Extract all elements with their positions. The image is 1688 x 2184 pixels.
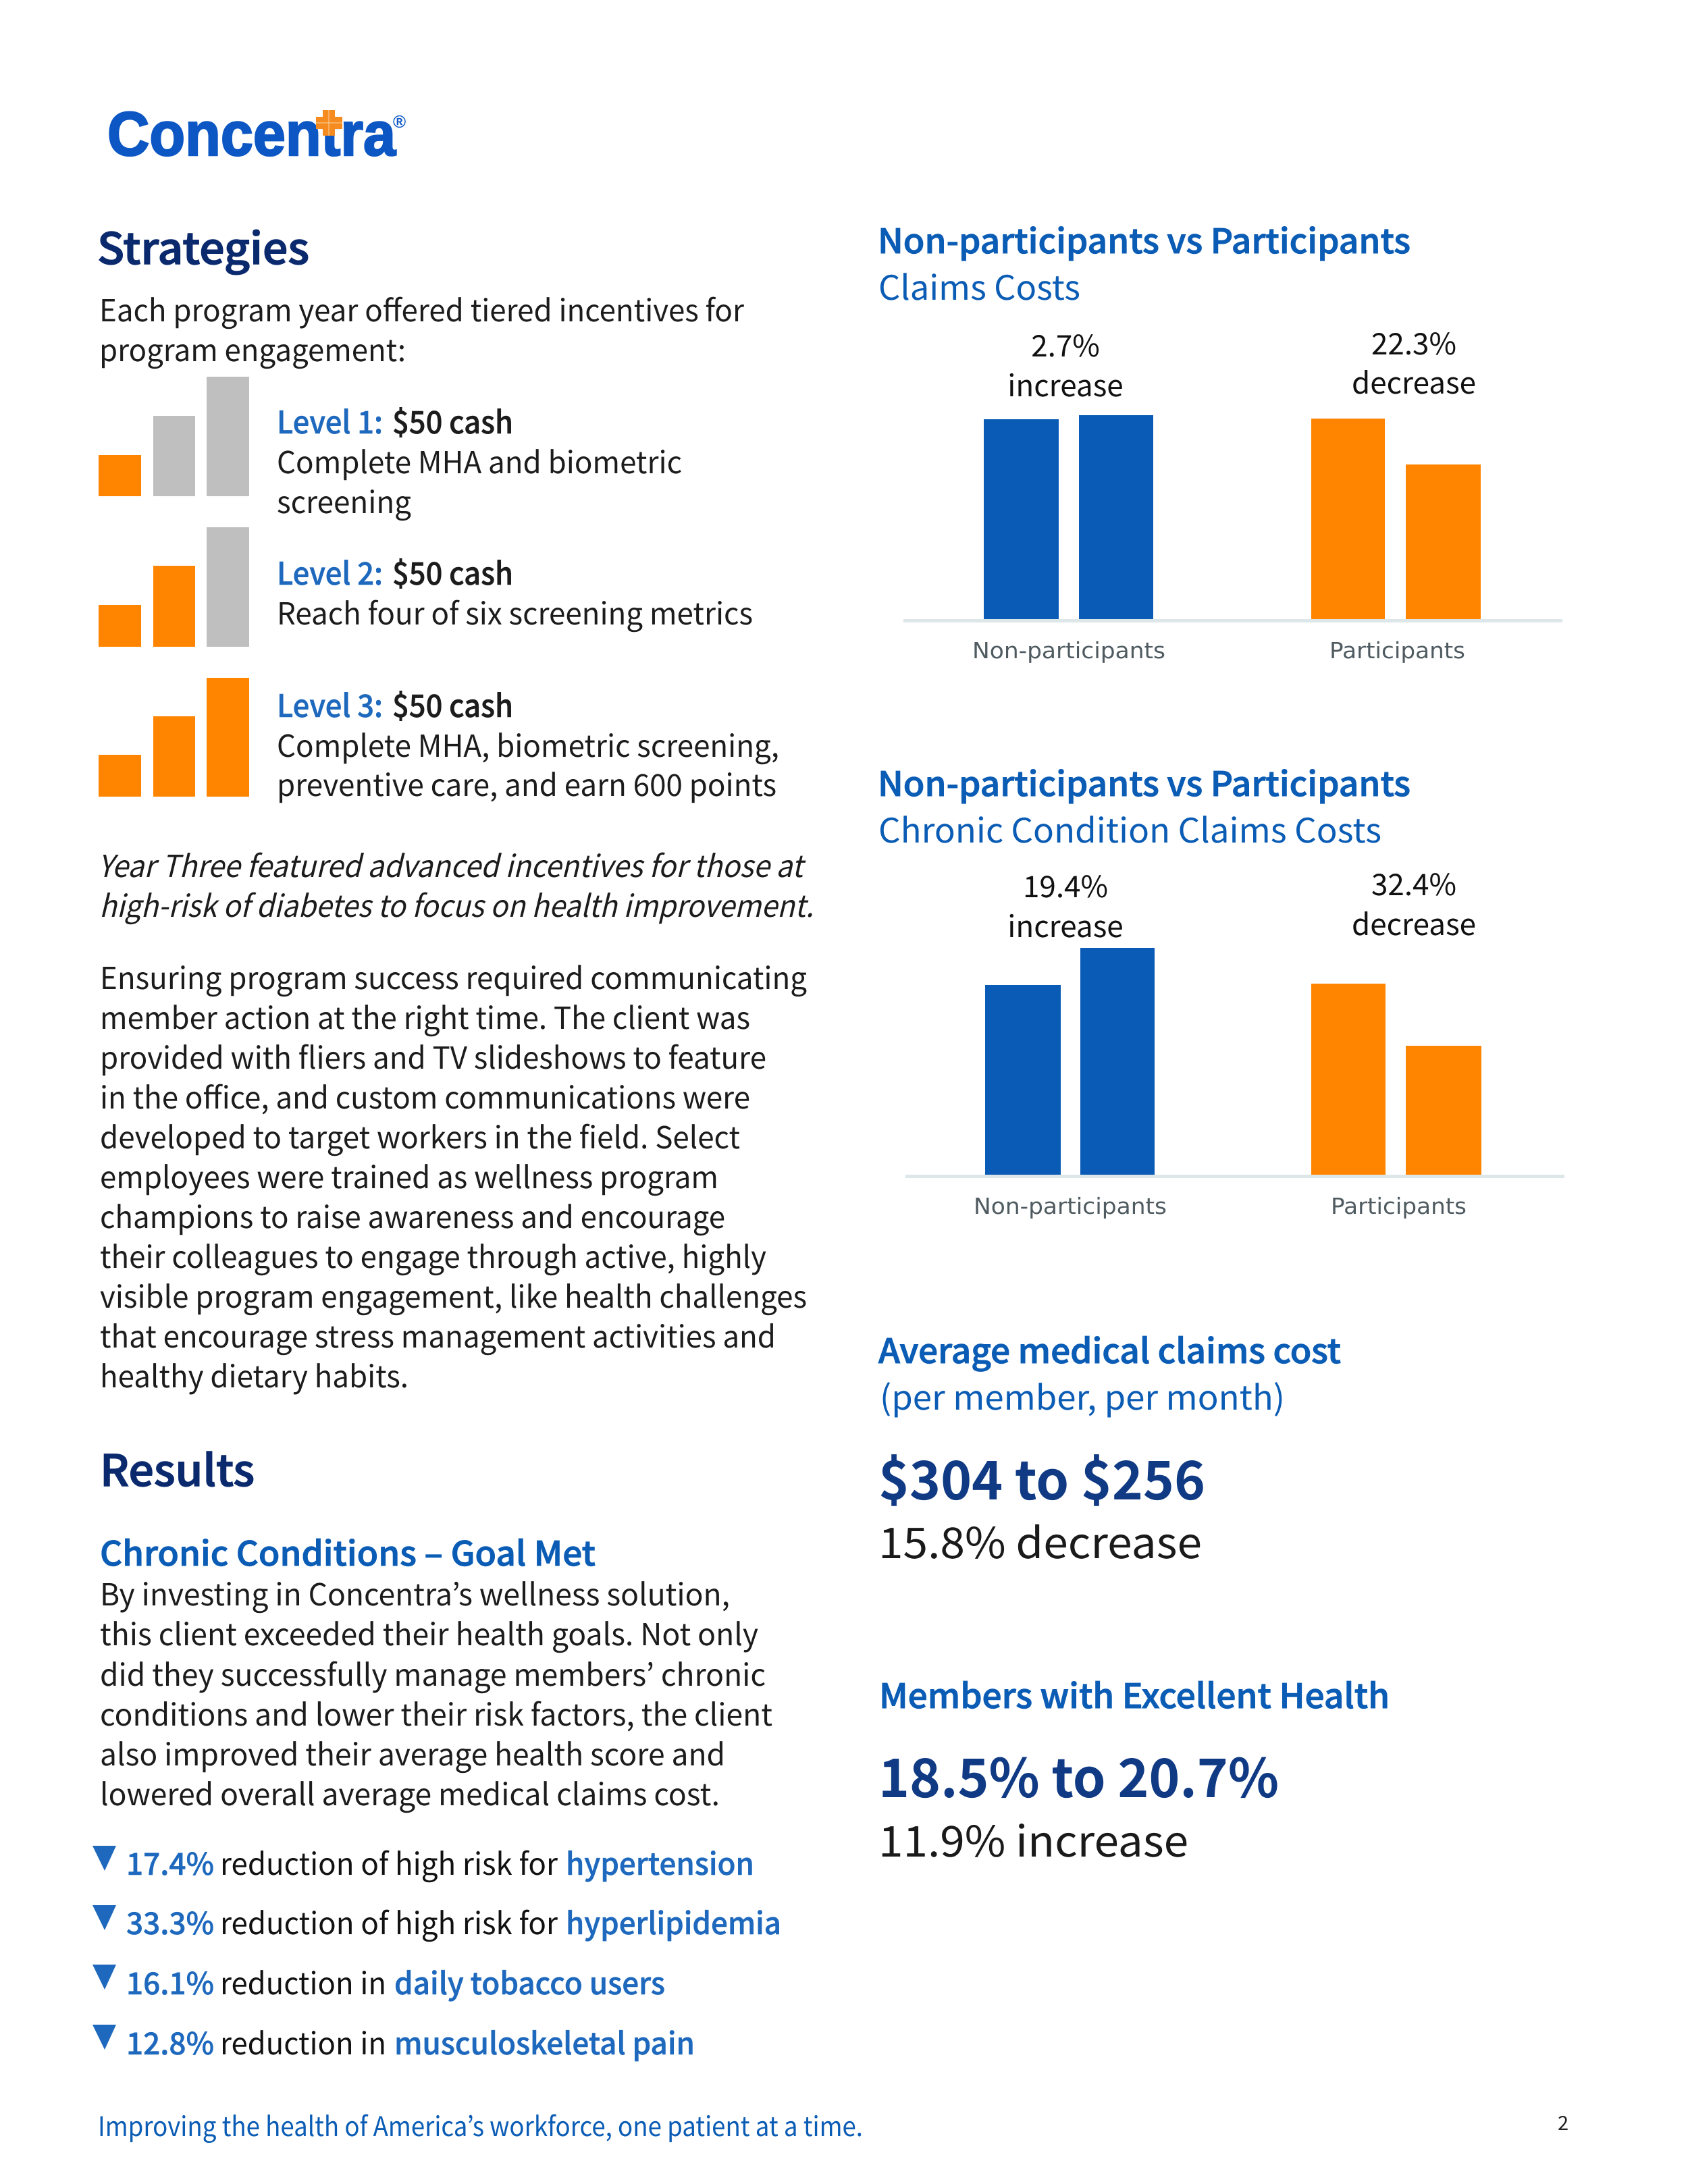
text block: results paragraph [100,1570,772,1814]
text block: communication paragraph [100,954,807,1396]
text block: strategies intro [99,286,745,370]
axis labels: Non-participants [972,637,1165,664]
bar label: 2.7% increase: 2.7% [1031,322,1100,365]
bullet: musculoskeletal pain [93,2019,695,2063]
bar chart: chronic condition bars [905,948,1564,1178]
text block: results paragraph: this client exceeded their health goals. Not only [100,1610,758,1654]
stat label: 15.8% decrease: 15.8% decrease [878,1510,1202,1571]
bullet: daily tobacco users [93,1959,665,2003]
heading: claims costs: Non-participants vs Participants [878,215,1410,263]
heading: claims costs [878,215,1410,310]
heading: Results: Results [100,1437,255,1499]
bar chart: claims costs bars [903,415,1562,622]
text block: level 3 [277,682,779,805]
bullet: daily tobacco users: reduction in [220,1959,386,2003]
bullet: hypertension: hypertension [566,1840,754,1884]
text block: level 1: Complete MHA and biometric [277,438,682,482]
text block: communication paragraph: employees were trained as wellness program [100,1153,718,1197]
logo: Concentra: ® [393,111,406,132]
bar label: 2.7% increase: increase [1007,362,1124,405]
bar label: 32.4% decrease [1352,861,1476,944]
bullet: hyperlipidemia: 33.3% [126,1899,214,1943]
bullet: hyperlipidemia [93,1899,781,1943]
text block: strategies intro: program engagement: [99,326,406,370]
stat: $304 to $256: $304 to $256 [878,1437,1205,1515]
heading: average medical claims cost: (per member, per month) [880,1371,1285,1420]
bar label: 19.4% increase: 19.4% [1023,863,1108,906]
panel: results [93,1437,781,2063]
text block: communication paragraph: developed to target workers in the field. Select [100,1113,740,1157]
axis labels: Participants [1329,637,1465,664]
bar label: 19.4% increase: increase [1007,903,1124,946]
panel: chronic condition claims costs chart [878,757,1564,1219]
text block: level 1: Level 1: [277,398,383,443]
bar label: 22.3% decrease: decrease [1352,359,1476,402]
bullet: daily tobacco users: 16.1% [126,1959,214,2003]
icon: level 1 bars [99,377,249,496]
text block: communication paragraph: member action at the right time. The client was [100,994,750,1038]
bar label: 2.7% increase [1007,322,1124,405]
text block: communication paragraph: Ensuring program success required communicating [100,954,807,998]
heading: chronic condition claims costs: Non-participants vs Participants [878,757,1410,806]
text block: level 3: Level 3: [277,682,383,726]
bullet: hyperlipidemia: reduction of high risk for [220,1899,558,1943]
bullet: musculoskeletal pain: reduction in [220,2019,386,2063]
text block: level 2: Level 2: [277,550,383,594]
heading: average medical claims cost: Average medical claims cost [878,1325,1341,1373]
text block: communication paragraph: healthy dietary habits. [100,1352,408,1396]
axis labels: Participants [1331,1193,1467,1219]
bullet: hypertension: reduction of high risk for [220,1840,558,1884]
text block: results paragraph: conditions and lower their risk factors, the client [100,1690,772,1734]
text block: level 3: $50 cash [392,682,513,726]
text block: level 1 [277,398,682,522]
text block: results paragraph: also improved their average health score and [100,1730,725,1774]
stat label: 11.9% increase: 11.9% increase [878,1808,1188,1869]
bar label: 19.4% increase [1007,863,1124,946]
bar label: 32.4% decrease: 32.4% [1371,861,1456,904]
bullet: daily tobacco users: daily tobacco users [394,1959,665,2003]
bar label: 32.4% decrease: decrease [1352,901,1476,944]
icon: level 3 bars [99,678,249,797]
heading: Strategies: Strategies [97,215,309,277]
axis labels [974,1193,1467,1219]
heading: chronic condition claims costs [878,757,1410,853]
text block: level 3: Complete MHA, biometric screening, [277,722,779,766]
bar label: 22.3% decrease [1352,320,1476,402]
page number: 2 [1558,2108,1568,2136]
bar label: 22.3% decrease: 22.3% [1371,320,1456,363]
heading: claims costs: Claims Costs [878,261,1080,310]
text block: year three note [98,842,814,926]
bullet: hypertension: 17.4% [126,1840,214,1884]
text block: results paragraph: did they successfully manage members’ chronic [100,1651,766,1695]
text block: level 2: Reach four of six screening metrics [277,589,753,633]
text block: communication paragraph: provided with fliers and TV slideshows to feature [100,1034,766,1077]
footer tagline: Improving the health of America’s workforce, one patient at a time. [98,2105,863,2144]
text block: strategies intro: Each program year offered tiered incentives for [99,286,745,330]
text block: communication paragraph: their colleagues to engage through active, highly [100,1233,766,1277]
bullet: musculoskeletal pain: musculoskeletal pain [394,2019,695,2063]
panel: members with excellent health [878,1670,1390,1869]
bullet: hyperlipidemia: hyperlipidemia [566,1899,781,1943]
heading: chronic conditions: Chronic Conditions – Goal Met [100,1527,596,1576]
heading: average medical claims cost [878,1325,1341,1420]
text block: communication paragraph: in the office, and custom communications were [100,1073,750,1117]
stat: 18.5% to 20.7%: 18.5% to 20.7% [878,1735,1279,1813]
text block: level 1: $50 cash [392,398,513,443]
text block: level 2: $50 cash [392,550,513,594]
text block: year three note: Year Three featured advanced incentives for those at [98,842,806,886]
heading: chronic condition claims costs: Chronic Condition Claims Costs [878,804,1381,853]
text block: level 3: preventive care, and earn 600 points [277,761,776,805]
panel: claims costs chart [878,215,1562,664]
icon: level 2 bars [99,527,249,647]
panel: strategies [97,215,814,1396]
text block: year three note: high-risk of diabetes to focus on health improvement. [99,882,814,926]
logo: Concentra: Concentra [107,100,396,169]
panel: average medical claims cost [878,1325,1341,1571]
heading: members with excellent health: Members with Excellent Health [879,1670,1390,1718]
axis labels: Non-participants [974,1193,1167,1219]
text block: communication paragraph: champions to raise awareness and encourage [100,1193,725,1237]
text block: level 1: screening [277,478,411,522]
text block: level 2 [277,550,753,633]
text block: communication paragraph: that encourage stress management activities and [100,1312,776,1356]
text block: communication paragraph: visible program engagement, like health challenges [100,1273,807,1316]
bullet: hypertension [93,1840,754,1884]
axis labels [972,637,1465,664]
text block: results paragraph: lowered overall average medical claims cost. [100,1770,720,1814]
text block: results paragraph: By investing in Concentra’s wellness solution, [100,1570,730,1614]
bullet: musculoskeletal pain: 12.8% [126,2019,214,2063]
